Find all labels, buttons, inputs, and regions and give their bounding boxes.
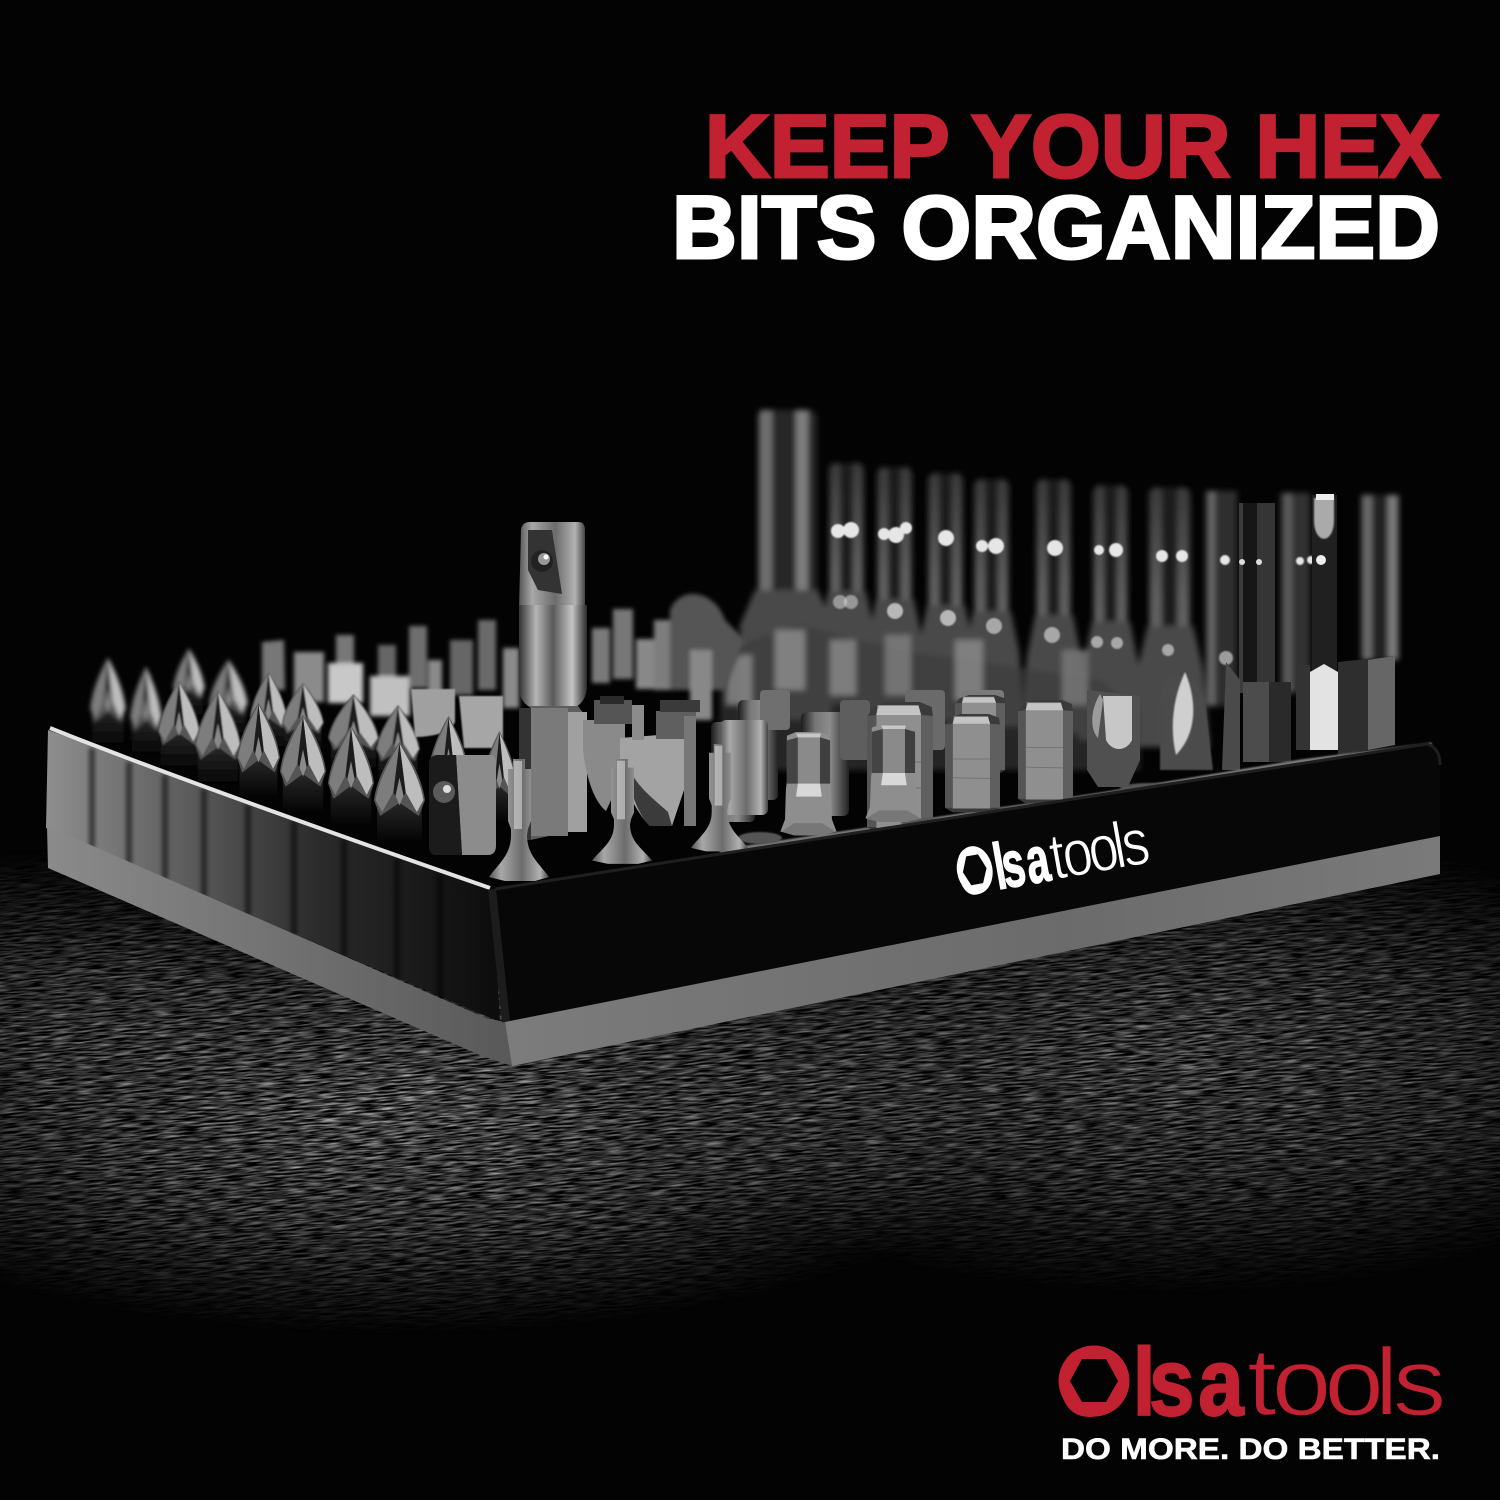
socket adapter <box>519 522 587 840</box>
flared bits <box>489 744 748 881</box>
headline: BITS ORGANIZED <box>672 177 1440 277</box>
sharp rear right bits <box>1222 494 1395 770</box>
flat blades behind <box>411 689 503 748</box>
flat-head and phillips bits, right <box>1087 672 1213 787</box>
top rim highlight <box>50 728 490 888</box>
rear phillips bits <box>90 648 248 753</box>
lower strip left <box>47 826 512 1066</box>
tray surface debris <box>700 783 1180 866</box>
front phillips bits <box>237 703 517 841</box>
tagline: DO MORE. DO BETTER. <box>1061 1433 1440 1466</box>
rib separators <box>92 748 440 1000</box>
brand logo: Olsa <box>1058 1328 1245 1435</box>
brand logo <box>1058 1328 1446 1436</box>
brand logo: tools <box>1247 1328 1446 1436</box>
rear blurred row of tall bits <box>720 410 1400 770</box>
tray left side face <box>46 728 512 1066</box>
bokeh highlights <box>831 522 1331 665</box>
mid field clutter <box>720 625 1140 770</box>
textured table surface <box>0 863 1500 1324</box>
small square drive adapter <box>429 755 496 855</box>
small hex shank bits between blades <box>594 690 1004 826</box>
headline: KEEP YOUR HEX <box>705 96 1440 196</box>
lower grey strip <box>505 836 1440 1066</box>
tray front face <box>492 744 1440 1066</box>
front hex shank bits <box>780 700 1073 835</box>
rim sheen <box>495 744 1440 889</box>
tray logo: Olsa <box>951 822 1055 910</box>
product: hex bit tray with bits <box>46 410 1440 1066</box>
left rear row of blurred bits <box>262 594 745 720</box>
tray surface reflection <box>720 745 1432 852</box>
wide hex bit at far right <box>1338 656 1395 755</box>
tray logo <box>951 804 1155 910</box>
flat blade bits <box>583 720 684 826</box>
tray logo: tools <box>1044 804 1155 894</box>
tall socket <box>740 410 832 720</box>
bit with knurled shank <box>1222 503 1291 770</box>
rear hex shanks <box>867 695 1005 833</box>
headline <box>672 96 1440 277</box>
bright white hex bit <box>1296 494 1338 750</box>
